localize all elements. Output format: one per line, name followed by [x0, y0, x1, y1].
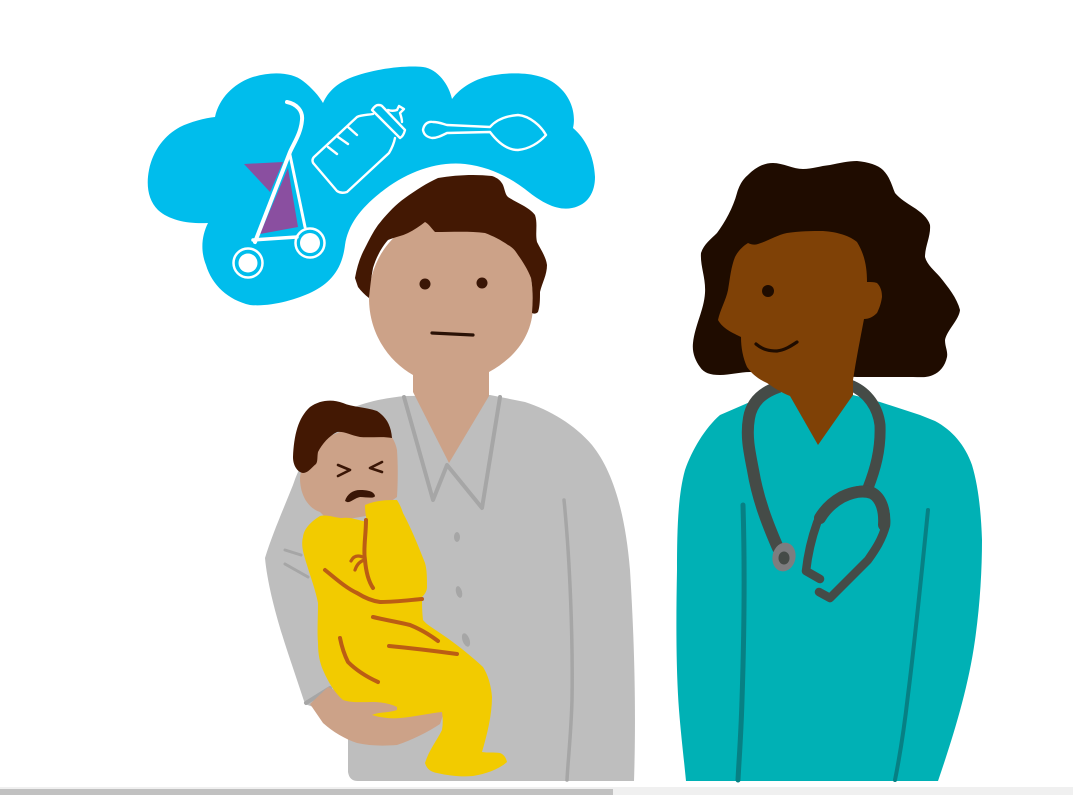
- parent neck: [413, 360, 489, 463]
- stethoscope: [748, 385, 886, 598]
- baby sleeper: [302, 500, 507, 776]
- baby sleeper folds: [325, 520, 457, 682]
- shirt collar and folds: [285, 397, 572, 780]
- icon: spoon: [423, 115, 546, 150]
- parent hair: [355, 175, 547, 314]
- shirt buttons: [454, 532, 472, 648]
- baby: [293, 401, 507, 776]
- icon: stroller: [234, 102, 324, 278]
- parent shirt: [265, 395, 635, 781]
- baby head: [300, 420, 398, 522]
- nurse hair: [693, 161, 960, 377]
- baby mouth: [345, 490, 375, 502]
- thought cloud: [148, 66, 595, 305]
- nurse face and neck: [718, 231, 882, 445]
- parent: [265, 175, 635, 781]
- parent eyes: [420, 278, 488, 290]
- bottom bar: [0, 787, 1073, 795]
- baby eyes: [338, 462, 382, 476]
- nurse smile: [756, 342, 797, 351]
- parent mouth: [432, 333, 473, 335]
- baby hair: [293, 401, 392, 473]
- nurse: [676, 161, 982, 781]
- nurse scrubs: [676, 392, 982, 781]
- nurse eye: [762, 285, 774, 297]
- icon: baby bottle: [312, 105, 405, 193]
- parent hand: [310, 687, 444, 746]
- scrubs folds: [738, 505, 928, 780]
- parent head: [369, 215, 533, 375]
